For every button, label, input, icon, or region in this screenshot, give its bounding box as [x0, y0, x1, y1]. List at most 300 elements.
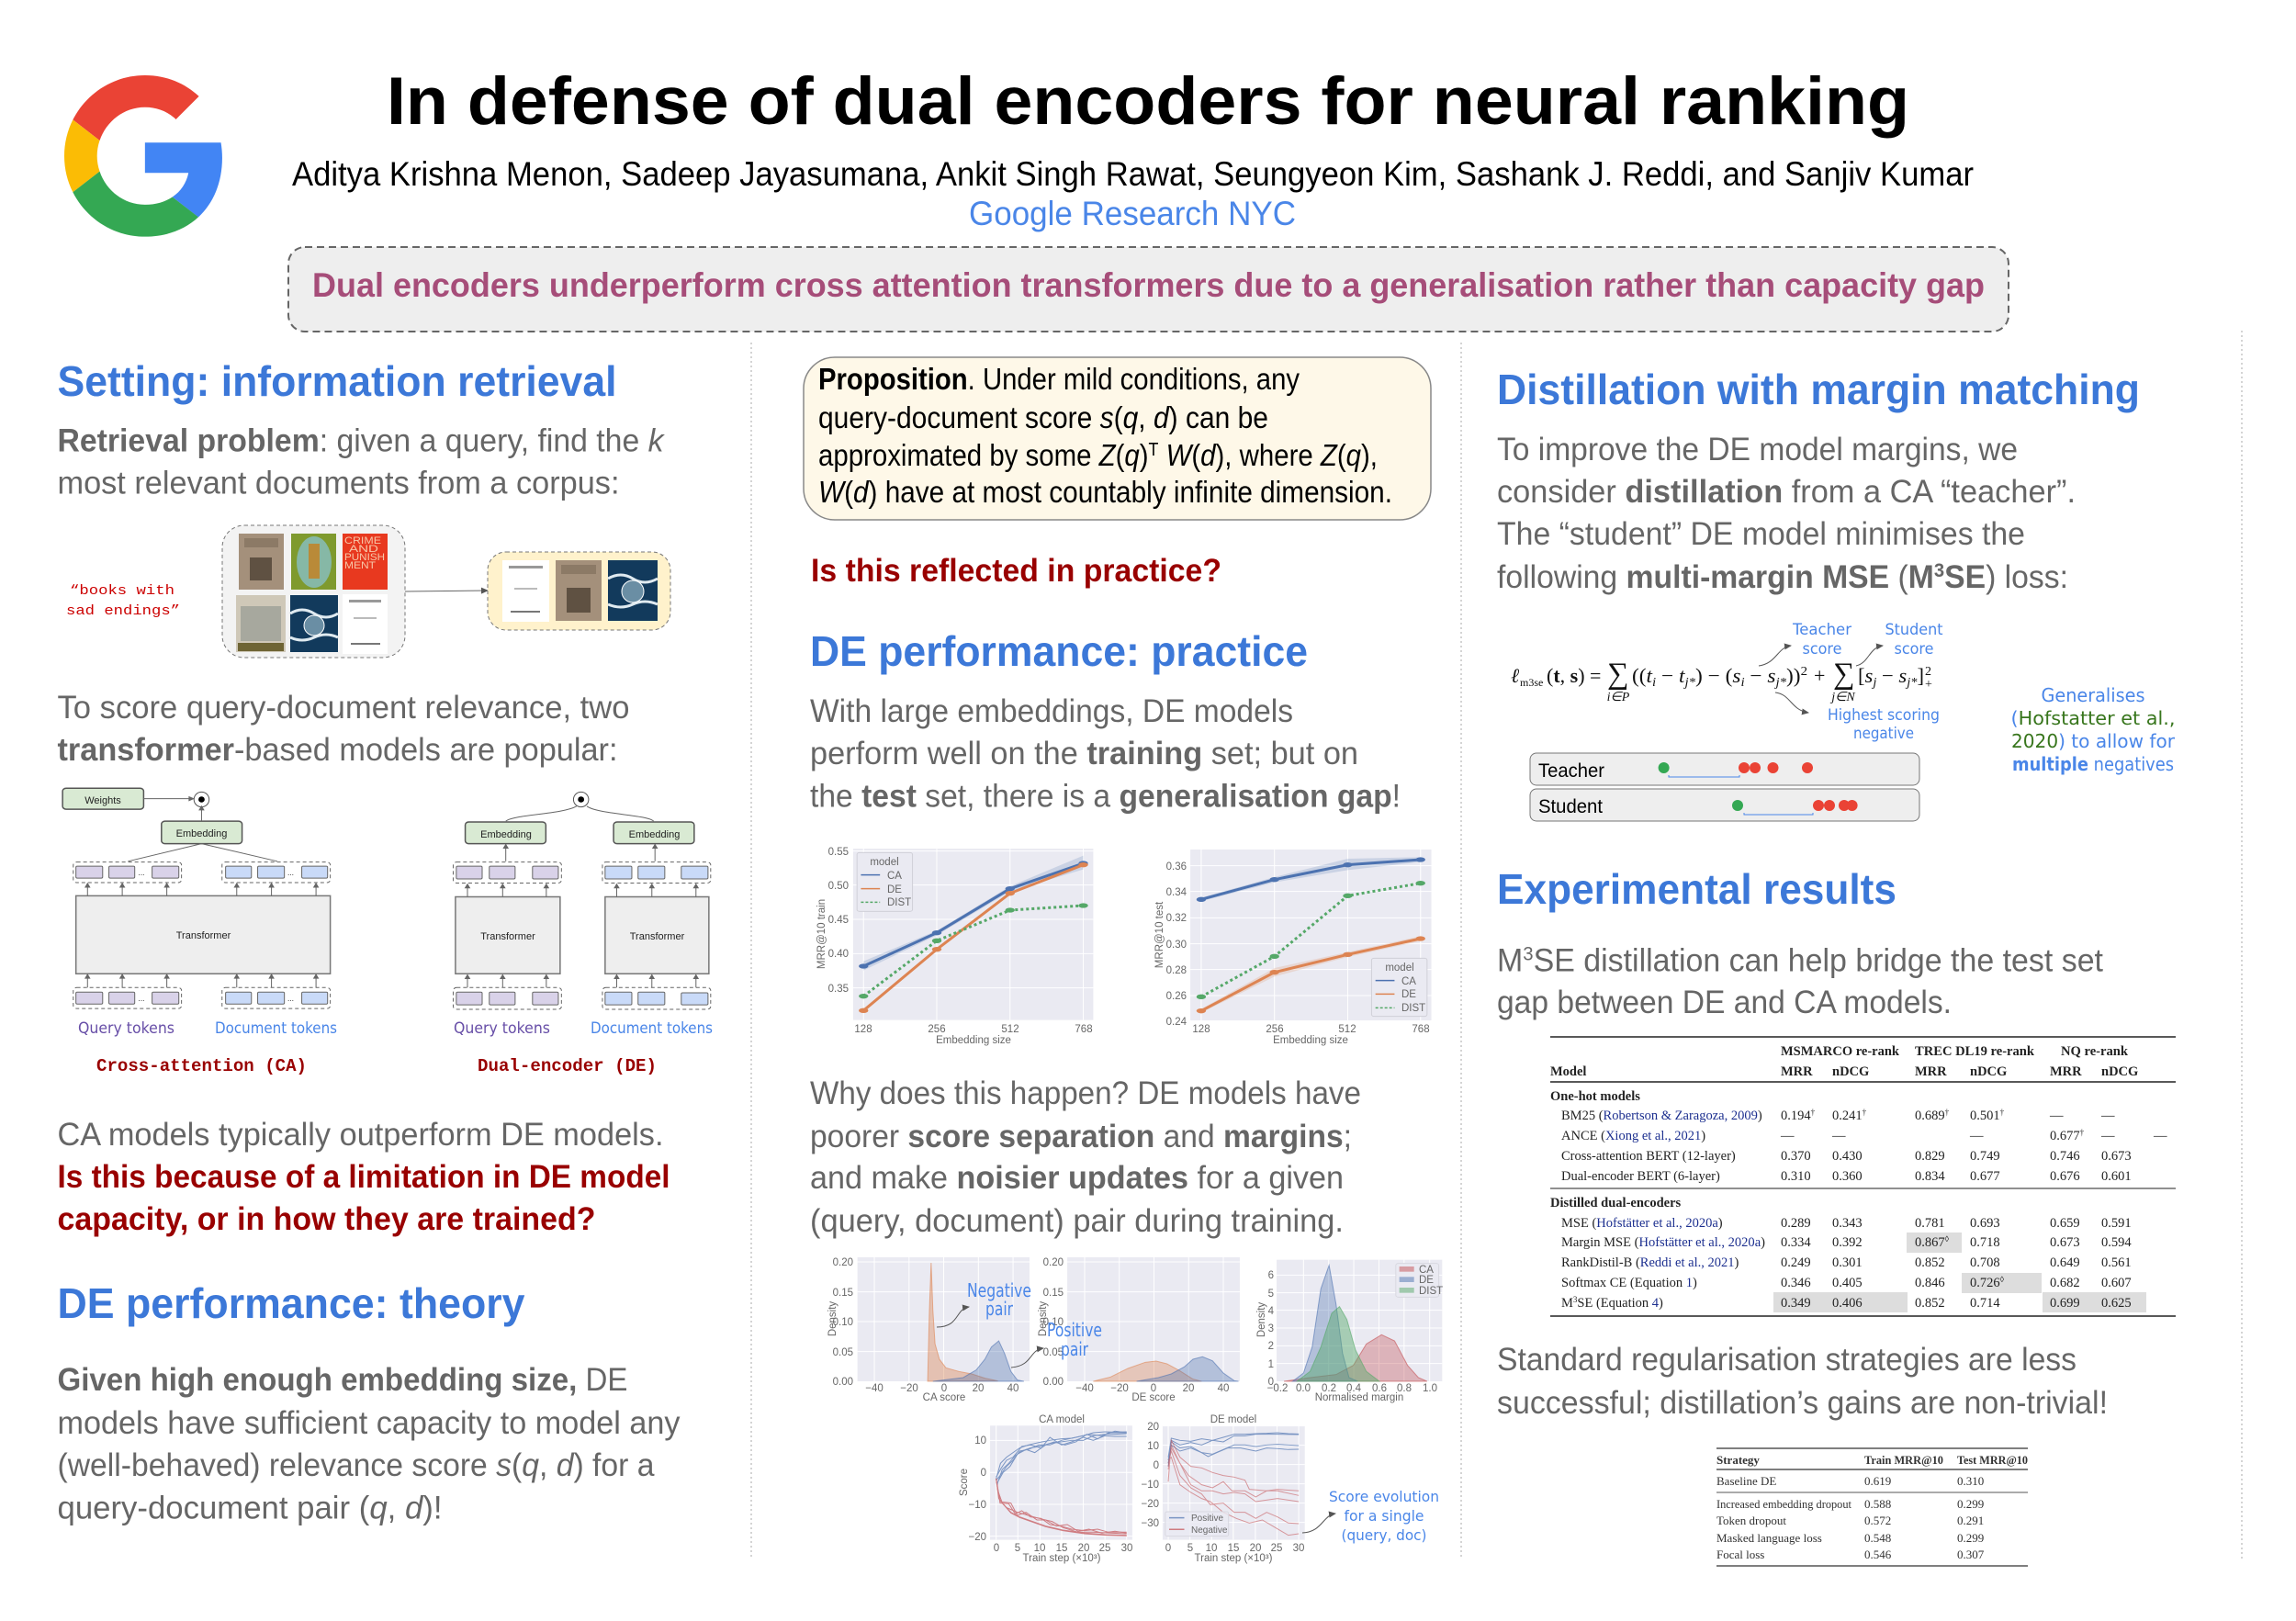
diagram: cross-attention model: Weights: [84, 795, 121, 806]
chart: CA model score evolution: 10: [974, 1435, 986, 1447]
chart: normalised margin density: 0.8: [1397, 1383, 1412, 1394]
results table: 0.659: [2050, 1216, 2080, 1231]
transformer intro text: [57, 690, 630, 768]
diagram: dual-encoder model: [453, 792, 711, 1009]
formula: multi-margin MSE loss: j: [1871, 676, 1876, 690]
formula: multi-margin MSE loss: s: [1732, 664, 1745, 690]
distillation text: SE: [1944, 559, 1986, 595]
formula: multi-margin MSE loss: −: [1656, 664, 1679, 687]
regularisation table: Baseline DE: [1716, 1474, 1776, 1488]
chart: CA model score evolution: 20: [1078, 1543, 1089, 1554]
retrieval problem text: Retrieval problem: given a query, find the k: [57, 422, 665, 459]
regularisation table: 0.619: [1864, 1474, 1891, 1488]
chart: normalised margin density: 0.0: [1296, 1383, 1311, 1394]
chart: DE model score evolution: Negative: [1191, 1525, 1228, 1536]
chart: normalised margin density: 1: [1268, 1359, 1274, 1370]
formula: multi-margin MSE loss: ((t: [1632, 664, 1652, 687]
chart: CA score density: CA score: [923, 1392, 965, 1403]
results text: gap between DE and CA models.: [1497, 985, 1952, 1020]
results table: ANCE (Xiong et al., 2021): [1561, 1129, 1705, 1143]
chart: DE model score evolution: 10: [1147, 1441, 1159, 1452]
chart: normalised margin density: 2: [1268, 1341, 1274, 1352]
theory text: [57, 1362, 681, 1526]
results table: †: [1945, 1108, 1950, 1117]
chart: MRR@10 test: 0.24: [1166, 1017, 1187, 1028]
chart: normalised margin density: DE: [1419, 1275, 1434, 1286]
chart: CA model score evolution: 25: [1099, 1543, 1110, 1554]
chart: MRR@10 test: Embedding size: [1273, 1035, 1348, 1046]
chart: MRR@10 train: DE: [887, 884, 902, 895]
results table: ◊: [1945, 1234, 1950, 1244]
chart: DE score density: 0.10: [1043, 1317, 1064, 1328]
chart: MRR@10 train: 0.45: [828, 915, 849, 926]
chart: DE score density: 0: [1151, 1383, 1156, 1394]
question in red: capacity, or in how they are trained?: [57, 1201, 595, 1237]
regularisation text: Standard regularisation strategies are less: [1497, 1342, 2077, 1378]
annotation: positive pair: [1011, 1319, 1102, 1368]
heading: DE performance practice: DE performance: practice: [810, 627, 1308, 675]
chart: normalised margin density: [1256, 1260, 1443, 1403]
chart: CA score density: 0.05: [833, 1347, 853, 1358]
chart: DE score density: 0.20: [1043, 1257, 1064, 1268]
formula: multi-margin MSE loss: i: [1740, 676, 1745, 690]
chart: DE model score evolution: −30: [1141, 1518, 1159, 1529]
formula: multi-margin MSE loss: i: [1652, 676, 1656, 690]
chart: normalised margin density: 1.0: [1423, 1383, 1437, 1394]
results table: —: [1969, 1129, 1984, 1143]
results table: 0.430: [1832, 1149, 1863, 1164]
chart: MRR@10 train: MRR@10 train: [816, 899, 827, 969]
annotation: negative pair: pair: [985, 1298, 1014, 1320]
formula annotations: Teacher: [1792, 621, 1851, 639]
results table: RankDistil-B (Reddi et al., 2021): [1561, 1255, 1739, 1270]
chart: CA score density: [827, 1257, 1030, 1403]
regularisation table: 0.307: [1957, 1548, 1985, 1561]
chart: CA model score evolution: 0: [994, 1543, 999, 1554]
heading: Distillation with margin matching: [1497, 366, 2140, 413]
formula annotations: score: [1894, 640, 1934, 659]
chart: MRR@10 test: 0.26: [1166, 991, 1187, 1002]
results table: NQ re-rank: [2061, 1044, 2129, 1059]
chart: DE model score evolution: DE model: [1210, 1414, 1256, 1425]
distillation text: consider distillation from a CA “teacher”.: [1497, 474, 2076, 510]
corpus of book covers: MENT: [344, 560, 376, 571]
results table: 0.781: [1915, 1216, 1945, 1231]
chart: normalised margin density: 6: [1268, 1270, 1274, 1281]
transformer intro text: transformer-based models are popular:: [57, 732, 617, 768]
results table: 0.241: [1832, 1109, 1863, 1123]
formula: multi-margin MSE loss: +: [1814, 664, 1825, 687]
teacher margin bar: [1530, 753, 1919, 785]
chart: CA score density: Density: [827, 1301, 838, 1336]
chart: CA model score evolution: 10: [1034, 1543, 1045, 1554]
results table: Model: [1550, 1064, 1586, 1079]
results table: †: [1863, 1108, 1867, 1117]
formula annotations: score: [1802, 640, 1842, 659]
formula: multi-margin MSE loss: +: [1925, 678, 1932, 692]
results table: —: [1780, 1129, 1795, 1143]
chart: DE model score evolution: 20: [1250, 1543, 1261, 1554]
results table: Softmax CE (Equation 1): [1561, 1276, 1697, 1290]
retrieval problem text: most relevant documents from a corpus:: [57, 465, 619, 501]
panel: proposition callout: query-document score s(q, d) can be: [818, 400, 1268, 434]
chart: DE model score evolution: [1141, 1414, 1305, 1564]
annotation: generalises: multiple negatives: [2012, 753, 2174, 775]
regularisation text: successful; distillation’s gains are non-trivial!: [1497, 1385, 2108, 1421]
annotation: generalises: Generalises: [2041, 684, 2145, 706]
results table: MSE (Hofstätter et al., 2020a): [1561, 1216, 1723, 1231]
transformer intro text: To score query-document relevance, two: [57, 690, 630, 726]
results table: —: [2153, 1129, 2167, 1143]
chart: MRR@10 train: 128: [854, 1024, 872, 1035]
chart: MRR@10 test: 0.32: [1166, 913, 1187, 924]
chart: DE model score evolution: 25: [1271, 1543, 1282, 1554]
regularisation table: Masked language loss: [1716, 1531, 1822, 1545]
formula: multi-margin MSE loss: s: [1898, 664, 1917, 690]
results table: 0.649: [2050, 1255, 2080, 1270]
results table: 0.673: [2050, 1235, 2080, 1250]
chart: MRR@10 test: DIST: [1401, 1003, 1425, 1014]
results table: ◊: [2000, 1275, 2005, 1284]
chart: MRR@10 test: model: [1385, 962, 1414, 974]
regularisation table: 0.588: [1864, 1497, 1891, 1511]
panel: proposition callout: W(d), where Z(q),: [1166, 438, 1379, 472]
results table: MRR: [1915, 1064, 1947, 1079]
formula: multi-margin MSE loss: j*: [1905, 676, 1917, 690]
regularisation table: Strategy: [1716, 1453, 1760, 1467]
annotation: generalises: [2011, 684, 2176, 775]
chart: CA model score evolution: Train step (×10³): [1023, 1553, 1101, 1564]
diagram: dual-encoder model: Transformer: [630, 931, 685, 942]
key takeaway callout: Dual encoders underperform cross attention transformers due to a generalisation rather than capacity gap: [312, 266, 1985, 304]
heading: Experimental results: [1497, 865, 1896, 913]
chart: DE score density: 40: [1218, 1383, 1229, 1394]
diagram: cross-attention model: ...: [287, 994, 294, 1003]
chart: MRR@10 test: 512: [1338, 1024, 1356, 1035]
results text: 3: [1523, 944, 1534, 964]
authors: Aditya Krishna Menon, Sadeep Jayasumana, Ankit Singh Rawat, Seungyeon Kim, Sashank J. Reddi, and Sanjiv Kumar: [292, 155, 1974, 193]
formula: multi-margin MSE loss: j*: [1773, 676, 1786, 690]
chart: MRR@10 train: 0.55: [828, 847, 849, 858]
chart: normalised margin density: 0: [1268, 1377, 1274, 1388]
results table: M: [1561, 1296, 1573, 1311]
results table: 0.846: [1915, 1276, 1945, 1290]
corpus of book covers: PUNISH: [344, 552, 385, 563]
chart: MRR@10 train: 0.40: [828, 949, 849, 960]
results text: SE distillation can help bridge the test set: [1534, 942, 2103, 979]
teacher margin bar: Teacher: [1538, 760, 1604, 782]
chart: MRR@10 test: MRR@10 test: [1154, 901, 1165, 968]
regularisation table: 0.291: [1957, 1514, 1984, 1527]
formula: multi-margin MSE loss: ∑: [1833, 658, 1855, 691]
chart: MRR@10 train: 768: [1075, 1024, 1093, 1035]
why does this happen text: and make noisier updates for a given: [810, 1160, 1344, 1196]
results table: Distilled dual-encoders: [1550, 1196, 1682, 1210]
regularisation table: 0.299: [1957, 1497, 1984, 1511]
chart: DE model score evolution: 15: [1228, 1543, 1239, 1554]
results table: 0.689: [1915, 1109, 1945, 1123]
chart: MRR@10 train: DIST: [887, 897, 911, 908]
results table: [1550, 1037, 2176, 1316]
results table: SE (Equation: [1577, 1296, 1652, 1311]
chart: MRR@10 test: [1154, 850, 1432, 1046]
formula: multi-margin MSE loss: m3se: [1520, 676, 1543, 689]
chart: DE score density: 20: [1183, 1383, 1194, 1394]
results table: nDCG: [2101, 1064, 2138, 1079]
regularisation table: Token dropout: [1716, 1514, 1786, 1527]
token labels: Query tokens: [454, 1019, 550, 1038]
regularisation table: 0.546: [1864, 1548, 1892, 1561]
annotation: score evolution: (query, doc): [1341, 1526, 1427, 1544]
icon: Google G logo: [64, 75, 222, 237]
chart: normalised margin density: −0.2: [1267, 1383, 1288, 1394]
practice text: the test set, there is a generalisation gap!: [810, 779, 1401, 814]
chart: CA score density: −20: [900, 1383, 918, 1394]
formula: multi-margin MSE loss: ℓ: [1511, 664, 1520, 687]
results table: 0.601: [2101, 1169, 2132, 1184]
corpus of book covers: CRIME: [344, 535, 381, 546]
formula: multi-margin MSE loss: t: [1679, 664, 1695, 690]
chart: CA score density: 0.00: [833, 1377, 853, 1388]
formula: multi-margin MSE loss: i∈P: [1607, 691, 1630, 704]
regularisation table: Test MRR@10: [1957, 1453, 2028, 1467]
annotation: positive pair: Positive: [1047, 1319, 1102, 1341]
chart: MRR@10 train: 0.50: [828, 881, 849, 892]
chart: MRR@10 train: [816, 847, 1093, 1046]
results table: †: [2000, 1108, 2005, 1117]
formula annotations: [1759, 621, 1943, 743]
diagram: dual-encoder model: Embedding: [480, 829, 532, 840]
regularisation table: 0.572: [1864, 1514, 1891, 1527]
annotation: positive pair: pair: [1061, 1338, 1089, 1360]
chart: DE score density: [1038, 1257, 1240, 1403]
results table: 0.406: [1832, 1296, 1863, 1311]
results table: 0.673: [2101, 1149, 2132, 1164]
affiliation: Google Research NYC: [969, 195, 1296, 232]
annotation: negative pair: Negative: [967, 1279, 1031, 1301]
chart: DE model score evolution: 20: [1147, 1422, 1159, 1433]
chart: CA model score evolution: 30: [1121, 1543, 1132, 1554]
formula: multi-margin MSE loss: [s: [1858, 664, 1873, 687]
results table: 0.310: [1781, 1169, 1811, 1184]
student margin bar: [1530, 789, 1919, 821]
chart: DE score density: 0.15: [1043, 1288, 1064, 1299]
chart: CA model score evolution: 15: [1056, 1543, 1067, 1554]
chart: CA model score evolution: CA model: [1039, 1414, 1085, 1425]
results table: 0.625: [2101, 1296, 2132, 1311]
formula: multi-margin MSE loss: (t, s) =: [1547, 664, 1601, 687]
chart: normalised margin density: DIST: [1419, 1286, 1443, 1297]
chart: MRR@10 test: CA: [1401, 976, 1416, 987]
chart: MRR@10 test: 128: [1192, 1024, 1210, 1035]
results table: —: [2100, 1129, 2115, 1143]
regularisation table: 0.548: [1864, 1531, 1891, 1545]
distillation text: ) loss:: [1986, 559, 2071, 595]
panel: DE performance theory: [57, 1279, 681, 1526]
chart: DE model score evolution: −10: [1141, 1480, 1159, 1491]
formula: multi-margin MSE loss: )): [1786, 664, 1801, 687]
chart: DE model score evolution: 30: [1293, 1543, 1304, 1554]
results table: 0.693: [1970, 1216, 2000, 1231]
results table: 0.607: [2101, 1276, 2132, 1290]
regularisation table: Train MRR@10: [1864, 1453, 1943, 1467]
chart: DE score density: −40: [1075, 1383, 1094, 1394]
distillation text: following multi-margin MSE (M: [1497, 559, 1935, 595]
results table: 0.829: [1915, 1149, 1945, 1164]
chart: DE model score evolution: −20: [1141, 1499, 1159, 1510]
formula: multi-margin MSE loss: 2: [1925, 665, 1931, 679]
diagram: cross-attention model: Embedding: [176, 828, 227, 839]
results table: MRR: [1781, 1064, 1813, 1079]
results table: nDCG: [1970, 1064, 2007, 1079]
chart: MRR@10 test: DE: [1401, 989, 1416, 1000]
results table: 0.392: [1832, 1235, 1863, 1250]
annotation: generalises: 2020) to allow for: [2011, 730, 2176, 752]
diagram: cross-attention model: ...: [287, 868, 294, 877]
chart: CA model score evolution: Score: [959, 1469, 970, 1496]
results table: 0.561: [2101, 1255, 2132, 1270]
results table: 0.194: [1781, 1109, 1811, 1123]
panel: proposition callout: Proposition. Under mild conditions, any: [818, 362, 1300, 396]
formula annotations: negative: [1853, 725, 1914, 743]
panel: setting, information retrieval: [57, 357, 713, 1237]
formula: multi-margin MSE loss: −: [1745, 664, 1767, 687]
question in red: [57, 1159, 670, 1237]
chart: CA score density: 20: [973, 1383, 984, 1394]
model captions: Dual-encoder (DE): [478, 1056, 657, 1076]
chart: CA score density: −40: [865, 1383, 884, 1394]
results table: †: [2080, 1128, 2085, 1137]
distillation text: [1497, 432, 2076, 595]
heading: DE performance: theory: [57, 1279, 525, 1327]
results table: 0.301: [1832, 1255, 1863, 1270]
diagram: cross-attention model: [62, 788, 331, 1008]
formula: multi-margin MSE loss: ) − (: [1695, 664, 1732, 687]
results table: 0.370: [1781, 1149, 1811, 1164]
chart: normalised margin density: CA: [1419, 1265, 1434, 1276]
results table: 0.405: [1832, 1276, 1863, 1290]
chart: MRR@10 train: 512: [1001, 1024, 1019, 1035]
results table: 0.708: [1970, 1255, 2000, 1270]
results table: †: [1811, 1108, 1816, 1117]
chart: CA score density: 0: [941, 1383, 947, 1394]
results table: 0.867: [1915, 1235, 1945, 1250]
chart: DE model score evolution: 0: [1165, 1543, 1171, 1554]
panel: proposition callout: W(d) have at most countably infinite dimension.: [818, 475, 1392, 509]
chart: normalised margin density: 3: [1268, 1323, 1274, 1334]
chart: DE model score evolution: 5: [1187, 1543, 1193, 1554]
retrieved books: [488, 552, 670, 630]
chart: MRR@10 test: 0.36: [1166, 861, 1187, 872]
results table: 0.349: [1781, 1296, 1811, 1311]
annotation: generalises: (Hofstatter et al.,: [2011, 707, 2175, 729]
annotation: score evolution: Score evolution: [1329, 1488, 1439, 1505]
panel: proposition callout: T: [1149, 440, 1158, 460]
chart: DE score density: 0.05: [1043, 1347, 1064, 1358]
why does this happen text: (query, document) pair during training.: [810, 1203, 1344, 1239]
results table: One-hot models: [1550, 1089, 1640, 1104]
panel: distillation with margin matching: [1497, 366, 2176, 821]
chart: normalised margin density: Density: [1256, 1302, 1267, 1337]
chart: CA score density: 0.15: [833, 1288, 853, 1299]
theory text: models have sufficient capacity to model any: [57, 1405, 681, 1441]
question: reflected in practice: Is this reflected in practice?: [811, 553, 1221, 589]
diagram: dual-encoder model: Transformer: [480, 931, 535, 942]
formula annotations: Student: [1885, 621, 1943, 639]
chart: DE score density: −20: [1110, 1383, 1129, 1394]
chart: MRR@10 test: 768: [1412, 1024, 1430, 1035]
results table: 0.676: [2050, 1169, 2080, 1184]
text: CA outperforms DE: CA models typically outperform DE models.: [57, 1117, 663, 1153]
chart: DE score density: Density: [1038, 1301, 1049, 1336]
chart: CA score density: 40: [1007, 1383, 1019, 1394]
results table: Cross-attention BERT (12-layer): [1561, 1149, 1736, 1164]
regularisation table: 0.299: [1957, 1531, 1984, 1545]
formula: multi-margin MSE loss: ∑: [1607, 658, 1629, 691]
diagram: cross-attention model: ...: [138, 868, 145, 877]
chart: normalised margin density: Normalised margin: [1315, 1392, 1403, 1403]
token labels: [78, 1019, 713, 1038]
chart: normalised margin density: 0.6: [1372, 1383, 1387, 1394]
chart: DE score density: DE score: [1131, 1392, 1176, 1403]
chart: MRR@10 train: Embedding size: [936, 1035, 1011, 1046]
chart: CA score density: 0.10: [833, 1317, 853, 1328]
results table: 0.834: [1915, 1169, 1945, 1184]
chart: MRR@10 test: 0.30: [1166, 940, 1187, 951]
results table: Margin MSE (Hofstätter et al., 2020a): [1561, 1235, 1765, 1250]
chart: MRR@10 train: CA: [887, 871, 902, 882]
results table: 0.682: [2050, 1276, 2080, 1290]
results table: TREC DL19 re-rank: [1915, 1044, 2035, 1059]
chart: DE model score evolution: 0: [1154, 1460, 1159, 1471]
regularisation text: [1497, 1342, 2108, 1421]
chart: MRR@10 test: 0.34: [1166, 887, 1187, 898]
results table: 0.726: [1970, 1276, 2000, 1290]
retrieval problem text: [57, 422, 665, 501]
question in red: Is this because of a limitation in DE model: [57, 1159, 670, 1195]
chart: DE model score evolution: Train step (×10³): [1195, 1553, 1273, 1564]
formula: multi-margin MSE loss: j*: [1683, 676, 1695, 690]
chart: CA model score evolution: 0: [981, 1468, 986, 1479]
results table: MRR: [2050, 1064, 2082, 1079]
results table: BM25 (Robertson & Zaragoza, 2009): [1561, 1109, 1762, 1123]
chart: CA model score evolution: 5: [1015, 1543, 1020, 1554]
results table: —: [2100, 1109, 2115, 1123]
chart: normalised margin density: 0.4: [1346, 1383, 1362, 1394]
annotation: negative pair: [937, 1279, 1031, 1327]
column dividers: [751, 331, 2242, 1559]
practice text: perform well on the training set; but on: [810, 736, 1358, 771]
practice text: [810, 693, 1401, 814]
results text: [1497, 942, 2103, 1020]
chart: MRR@10 test: 256: [1266, 1024, 1284, 1035]
chart: CA model score evolution: [959, 1414, 1132, 1564]
chart: CA model score evolution: −20: [968, 1532, 986, 1543]
chart: CA model score evolution: −10: [968, 1500, 986, 1511]
results table: 0.746: [2050, 1149, 2080, 1164]
results table: 4): [1652, 1296, 1663, 1311]
results table: 0.749: [1970, 1149, 2000, 1164]
theory text: query-document pair (q, d)!: [57, 1490, 443, 1526]
title: In defense of dual encoders for neural ranking: [387, 64, 1909, 139]
token labels: Document tokens: [591, 1019, 713, 1038]
chart: MRR@10 train: 0.35: [828, 984, 849, 995]
results table: 0.852: [1915, 1255, 1945, 1270]
annotation: score evolution: for a single: [1345, 1507, 1424, 1525]
results table: Dual-encoder BERT (6-layer): [1561, 1169, 1720, 1184]
key takeaway callout: [288, 247, 2009, 332]
regularisation table: Focal loss: [1716, 1548, 1764, 1561]
